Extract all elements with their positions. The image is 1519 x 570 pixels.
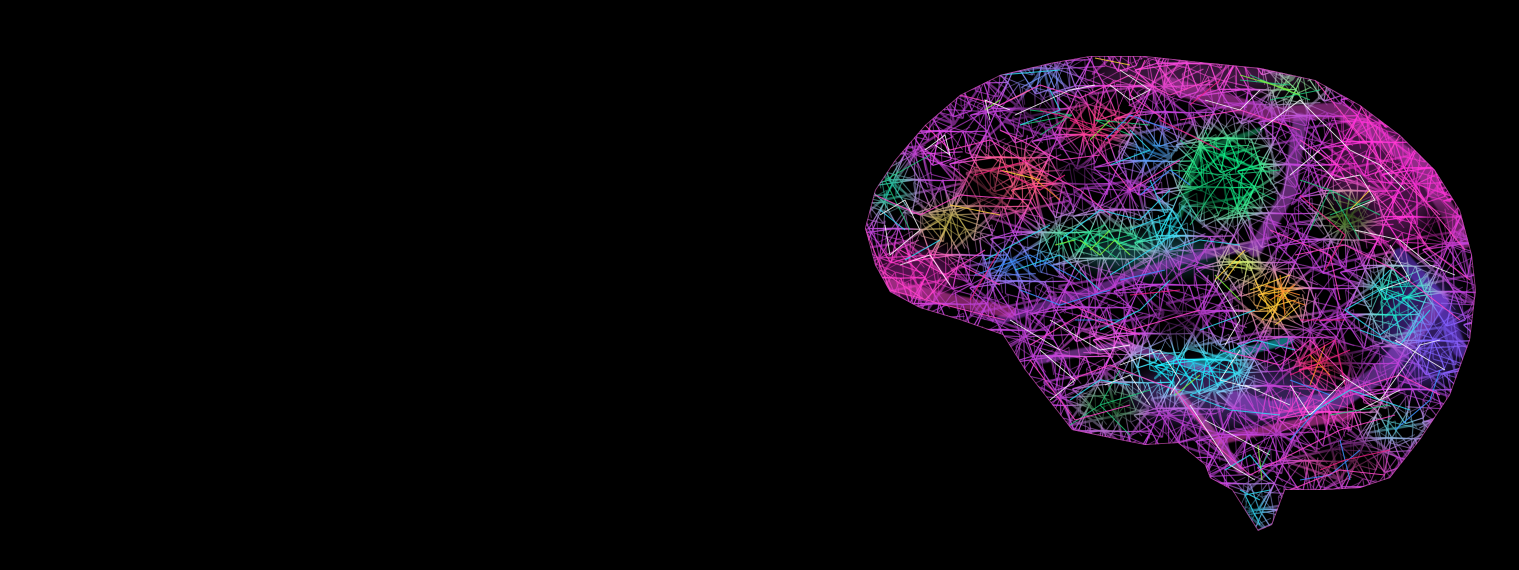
mesh: magenta lines <box>865 60 1470 490</box>
patterned mesh coloured by region <box>850 40 1490 540</box>
brain <box>850 40 1490 540</box>
illustration: wireframe neural brain on black background <box>865 56 1476 531</box>
outline edge <box>865 56 1476 531</box>
mesh: white highlight lines <box>880 70 1455 480</box>
mesh: green lines <box>885 75 1390 470</box>
mesh: blue and cyan lines <box>880 70 1440 525</box>
mesh: bright green, yellow and orange lines <box>950 58 1370 480</box>
translucent bands <box>890 85 1465 470</box>
darker mesh gaps <box>965 100 1447 524</box>
dim base glow <box>875 61 1460 425</box>
